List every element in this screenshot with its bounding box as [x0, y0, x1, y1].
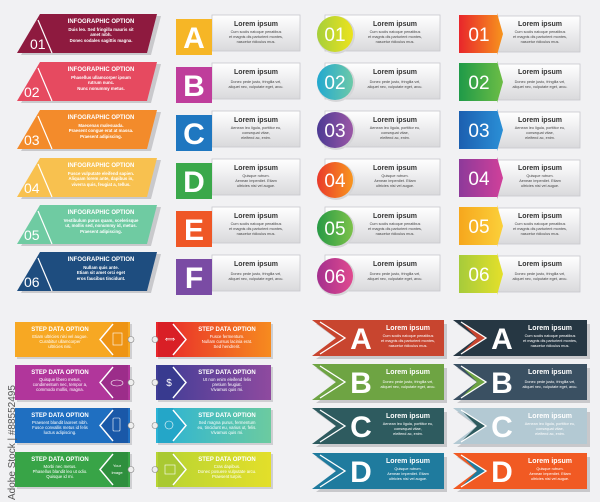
circle 04 — [317, 159, 440, 200]
circle 05: et magnis dis parturient montes, — [368, 227, 422, 231]
step data cards — [15, 322, 273, 489]
step card right 2: pretium feugiat. — [212, 382, 242, 387]
circle 06: 06 — [324, 267, 346, 288]
letter C: Lorem ipsum — [234, 117, 278, 124]
option 01: INFOGRAPHIC OPTION — [68, 19, 134, 25]
option 05: Praesent adipiscing. — [80, 229, 122, 234]
ribbon right D: Lorem ipsum — [528, 458, 572, 465]
ribbon right D — [453, 453, 590, 492]
arrow 01: nascetur ridiculus mus. — [521, 40, 559, 44]
ribbon left C: consequat vitae, — [394, 427, 422, 431]
ribbon right B: Lorem ipsum — [528, 369, 572, 376]
ribbon left A: Cum sociis natoque penatibus — [383, 334, 434, 338]
ribbon right D: ultricies nisi vel augue. — [531, 477, 569, 481]
arrow 05: Cum sociis natoque penatibus — [515, 222, 566, 226]
letter F: Donec pede justo, fringilla vel, — [231, 272, 281, 276]
letter A: Cum sociis natoque penatibus — [231, 30, 282, 34]
letter A: nascetur ridiculus mus. — [237, 40, 275, 44]
ribbon right D: D — [491, 456, 513, 489]
circle 05: 05 — [324, 219, 346, 240]
circle 03: Aenean leo ligula, porttitor eu, — [370, 126, 420, 130]
ribbon right B: aliquet nec, vulputate eget, arcu. — [523, 385, 577, 389]
arrow 04: ultricies nisi vel augue. — [521, 184, 559, 188]
step card left 2: Quisque libero metus, — [39, 377, 81, 382]
step card left 2: commodo mollis, magna. — [36, 387, 84, 392]
ribbon right B — [453, 364, 590, 403]
ribbon left C: Aenean leo ligula, porttitor eu, — [383, 422, 433, 426]
arrow 03: Aenean leo ligula, porttitor eu, — [515, 126, 565, 130]
letter D: ultricies nisi vel augue. — [237, 184, 275, 188]
letter B: Lorem ipsum — [234, 69, 278, 76]
option 05 — [17, 205, 161, 246]
circle 02: Donec pede justo, fringilla vel, — [370, 80, 420, 84]
letter A: et magnis dis parturient montes, — [229, 35, 283, 39]
circle 05: Lorem ipsum — [373, 213, 417, 220]
letter D: Aenean imperdiet. Etiam — [235, 179, 277, 183]
option 05: INFOGRAPHIC OPTION — [68, 210, 134, 216]
letter E: E — [184, 214, 204, 247]
option 01: Donec sodales sagittis magna. — [70, 38, 132, 43]
letter F: F — [185, 262, 203, 295]
step card right 3 — [152, 408, 273, 445]
ribbon banners A-D — [312, 320, 590, 492]
letter B — [176, 63, 300, 103]
circle 01: Cum sociis natoque penatibus — [370, 30, 421, 34]
option 04 — [17, 158, 161, 199]
arrow 05 — [459, 205, 580, 247]
letter E: et magnis dis parturient montes, — [229, 227, 283, 231]
step card left 3: STEP DATA OPTION — [31, 413, 89, 419]
option 03: Maecenas malesuada. — [78, 123, 124, 128]
step card right 2: Vivamus quis mi. — [211, 387, 243, 392]
arrow 06: 06 — [468, 265, 490, 286]
option 05: ut, mollis sed, nonummy id, metus. — [65, 223, 137, 228]
circle 04: Lorem ipsum — [373, 165, 417, 172]
ribbon right A: et magnis dis parturient montes, — [523, 339, 577, 343]
letter C: consequat vitae, — [242, 131, 270, 135]
arrow 06: Lorem ipsum — [518, 261, 562, 268]
ribbon left C: C — [350, 411, 372, 444]
circle 02 — [317, 63, 440, 102]
step card right 1: ⟺ — [165, 336, 175, 344]
ribbon left A: A — [350, 323, 372, 356]
arrow 01: Lorem ipsum — [518, 21, 562, 28]
letter E: Cum sociis natoque penatibus — [231, 222, 282, 226]
ribbon right A: Cum sociis natoque penatibus — [525, 334, 576, 338]
circle 03 — [317, 111, 440, 150]
ribbon right C: Lorem ipsum — [528, 413, 572, 420]
step card left 3: luctus adipiscing. — [44, 430, 76, 435]
option 06: Nullam quis ante. — [83, 265, 119, 270]
arrow 04: 04 — [468, 169, 490, 190]
arrow 01: et magnis dis parturient montes, — [513, 35, 567, 39]
option 03: INFOGRAPHIC OPTION — [68, 115, 134, 121]
letter C — [176, 111, 300, 151]
step card left 1: STEP DATA OPTION — [31, 327, 89, 333]
letter D: D — [183, 166, 205, 199]
step card left 4: Morbi nec metus. — [44, 464, 76, 469]
arrow 04 — [459, 157, 580, 199]
arrow 02: Donec pede justo, fringilla vel, — [515, 80, 565, 84]
ribbon right B: B — [491, 367, 513, 400]
option 01: 01 — [30, 36, 46, 52]
step card right 4: STEP DATA OPTION — [198, 457, 256, 463]
letter D: Quisque rutrum. — [242, 174, 270, 178]
option 04: Aliquam lorem ante, dapibus in, — [69, 176, 133, 181]
step card right 1: Fusce fermentum. — [210, 334, 244, 339]
ribbon left B: Lorem ipsum — [386, 369, 430, 376]
step card right 1: Sed hendrerit. — [214, 344, 240, 349]
option 05: 05 — [24, 227, 40, 243]
ribbon left D: D — [350, 456, 372, 489]
column: infographic options 01-06 — [17, 14, 161, 293]
circle 04: ultricies nisi vel augue. — [376, 184, 414, 188]
step card left 4: Your — [113, 463, 122, 468]
option 02: 02 — [24, 84, 40, 100]
arrow 01 — [459, 13, 580, 55]
ribbon left B: aliquet nec, vulputate eget, arcu. — [381, 385, 435, 389]
circle 05: Cum sociis natoque penatibus — [370, 222, 421, 226]
ribbon right C: Aenean leo ligula, porttitor eu, — [525, 422, 575, 426]
circle 06: Donec pede justo, fringilla vel, — [370, 272, 420, 276]
option 02: Phasellus ullamcorper ipsum — [71, 75, 131, 80]
option 04: 04 — [24, 180, 40, 196]
arrow 05: Lorem ipsum — [518, 213, 562, 220]
ribbon left B: Donec pede justo, fringilla vel, — [383, 380, 433, 384]
step card right 1: STEP DATA OPTION — [198, 327, 256, 333]
letter E — [176, 207, 300, 247]
option 03: Praesent congue erat at massa. — [69, 128, 133, 133]
circle 06: aliquet nec, vulputate eget, arcu. — [368, 277, 422, 281]
circle 02: Lorem ipsum — [373, 69, 417, 76]
ribbon left A: nascetur ridiculus mus. — [389, 344, 427, 348]
step card right 4 — [152, 452, 273, 489]
step card left 1: ultricies nisi. — [48, 344, 72, 349]
arrow 05: et magnis dis parturient montes, — [513, 227, 567, 231]
letter F: aliquet nec, vulputate eget, arcu. — [229, 277, 283, 281]
ribbon left D: Quisque rutrum. — [394, 467, 422, 471]
circle 01: Lorem ipsum — [373, 21, 417, 28]
step card right 3: Vivamus quis mi. — [211, 430, 243, 435]
arrow 02 — [459, 61, 580, 103]
circle 01: 01 — [324, 25, 346, 46]
ribbon left C: eleifend ac, enim. — [393, 432, 423, 436]
step card left 4: Phasellus blandit leo ut odio. — [33, 469, 87, 474]
step card left 4: Image — [111, 470, 123, 475]
step card right 2 — [152, 365, 273, 402]
letter C: C — [183, 118, 205, 151]
letter F — [176, 255, 300, 295]
option 06: INFOGRAPHIC OPTION — [68, 257, 134, 263]
step card left 4: STEP DATA OPTION — [31, 457, 89, 463]
circle 04: Aenean imperdiet. Etiam — [374, 179, 416, 183]
circle 01 — [317, 15, 440, 54]
ribbon left A: Lorem ipsum — [386, 325, 430, 332]
circle 05 — [317, 207, 440, 248]
step card right 4: Praesent turpis. — [212, 474, 242, 479]
circle 03: Lorem ipsum — [373, 117, 417, 124]
option 04: INFOGRAPHIC OPTION — [68, 163, 134, 169]
ribbon left D: ultricies nisi vel augue. — [389, 477, 427, 481]
ribbon right A: A — [491, 323, 513, 356]
step card left 1: Curabitur ullamcorper — [39, 339, 81, 344]
letter A: Lorem ipsum — [234, 21, 278, 28]
step card left 2: condimentum nec, tempor a, — [33, 382, 87, 387]
arrow 02: aliquet nec, vulputate eget, arcu. — [513, 85, 567, 89]
ribbon left B: B — [350, 367, 372, 400]
circle 06 — [317, 255, 440, 296]
option 06: eros faucibus tincidunt. — [77, 276, 125, 281]
step card right 4: Cras dapibus. — [214, 464, 240, 469]
step card right 2: STEP DATA OPTION — [198, 370, 256, 376]
arrow 02: Lorem ipsum — [518, 69, 562, 76]
ribbon left C: Lorem ipsum — [386, 413, 430, 420]
ribbon right B: Donec pede justo, fringilla vel, — [525, 380, 575, 384]
letter D: Lorem ipsum — [234, 165, 278, 172]
ribbon right A — [453, 320, 590, 359]
circle 03: 03 — [324, 121, 346, 142]
option 06: Etiam sit amet orci eget — [77, 270, 126, 275]
circle 02: 02 — [324, 73, 346, 94]
arrow 05: 05 — [468, 217, 490, 238]
letter C: Aenean leo ligula, porttitor eu, — [231, 126, 281, 130]
step card right 3: Sed magna purus, fermentum — [199, 420, 256, 425]
circle 04: 04 — [324, 171, 346, 192]
arrow 04: Lorem ipsum — [518, 165, 562, 172]
arrow 03: 03 — [468, 121, 490, 142]
option 04: viverra quis, feugiat a, tellus. — [72, 182, 130, 187]
arrow 01: Cum sociis natoque penatibus — [515, 30, 566, 34]
option 02: Nunc nonummy metus. — [77, 86, 125, 91]
step card left 3: Fusce convallis metus id felis — [32, 425, 88, 430]
step card right 3: eu, tincidunt eu, varius ut, felis. — [198, 425, 256, 430]
circle 02: aliquet nec, vulputate eget, arcu. — [368, 85, 422, 89]
ribbon left A: et magnis dis parturient montes, — [381, 339, 435, 343]
ribbon right C: consequat vitae, — [536, 427, 564, 431]
step card right 2: Ut non enim eleifend felis — [203, 377, 251, 382]
step card left 3 — [15, 408, 134, 445]
step card left 1: Etiam ultricies nisi vel augue. — [32, 334, 88, 339]
option 03 — [17, 110, 161, 151]
arrow 06: aliquet nec, vulputate eget, arcu. — [513, 277, 567, 281]
step card right 1: Nullam cursus lacinia erat. — [202, 339, 252, 344]
option 06: 06 — [24, 274, 40, 290]
option 06 — [17, 252, 161, 293]
option 03: 03 — [24, 132, 40, 148]
circle 03: eleifend ac, enim. — [380, 136, 410, 140]
ribbon left A — [312, 320, 447, 359]
arrow 04: Quisque rutrum. — [526, 174, 554, 178]
option 04: Fusce vulputate eleifend sapien. — [68, 171, 134, 176]
circle 05: nascetur ridiculus mus. — [376, 232, 414, 236]
arrow 05: nascetur ridiculus mus. — [521, 232, 559, 236]
ribbon left D — [312, 453, 447, 492]
step card left 4: Quisque id mi. — [46, 474, 74, 479]
option 02 — [17, 62, 161, 103]
arrow 06 — [459, 253, 580, 295]
step card right 3: STEP DATA OPTION — [198, 413, 256, 419]
option 02: INFOGRAPHIC OPTION — [68, 67, 134, 73]
ribbon right C: C — [491, 411, 513, 444]
ribbon left C — [312, 408, 447, 447]
arrow 01: 01 — [468, 25, 490, 46]
arrow 03: Lorem ipsum — [518, 117, 562, 124]
letter A — [176, 15, 300, 55]
option 01: Duis leo. Sed fringilla mauris sit — [68, 27, 134, 32]
letter C: eleifend ac, enim. — [241, 136, 271, 140]
step card left 1 — [15, 322, 134, 359]
arrow 03 — [459, 109, 580, 151]
arrow 04: Aenean imperdiet. Etiam — [519, 179, 561, 183]
ribbon left B — [312, 364, 447, 403]
step card left 2: STEP DATA OPTION — [31, 370, 89, 376]
step card right 2: $ — [166, 378, 172, 389]
letter B: aliquet nec, vulputate eget, arcu. — [229, 85, 283, 89]
arrow 03: eleifend ac, enim. — [525, 136, 555, 140]
letter D — [176, 159, 300, 199]
letter F: Lorem ipsum — [234, 261, 278, 268]
watermark: stock id: Adobe Stock | #88552495 — [7, 385, 18, 500]
step card right 1 — [152, 322, 273, 359]
circle 03: consequat vitae, — [381, 131, 409, 135]
ribbon left D: Lorem ipsum — [386, 458, 430, 465]
letter E: nascetur ridiculus mus. — [237, 232, 275, 236]
ribbon right D: Aenean imperdiet. Etiam — [529, 472, 571, 476]
column: arrow tabs 01-06 — [459, 13, 580, 295]
option 02: rutrum nunc. — [88, 80, 114, 85]
step card left 4 — [15, 452, 134, 489]
ribbon right C — [453, 408, 590, 447]
option 03: Praesent adipiscing. — [80, 134, 122, 139]
arrow 06: Donec pede justo, fringilla vel, — [515, 272, 565, 276]
ribbon right D: Quisque rutrum. — [536, 467, 564, 471]
arrow 02: 02 — [468, 73, 490, 94]
circle 01: nascetur ridiculus mus. — [376, 40, 414, 44]
column: letter boxes A-F — [176, 15, 300, 295]
ribbon right C: eleifend ac, enim. — [535, 432, 565, 436]
step card left 3: Praesent blandit laoreet nibh. — [32, 420, 88, 425]
step card left 2 — [15, 365, 134, 402]
circle 04: Quisque rutrum. — [381, 174, 409, 178]
letter B: B — [183, 70, 205, 103]
letter B: Donec pede justo, fringilla vel, — [231, 80, 281, 84]
option 01: amet nibh. — [90, 32, 112, 37]
column: circle numbers 01-06 — [317, 15, 440, 296]
circle 01: et magnis dis parturient montes, — [368, 35, 422, 39]
letter E: Lorem ipsum — [234, 213, 278, 220]
ribbon right A: nascetur ridiculus mus. — [531, 344, 569, 348]
circle 06: Lorem ipsum — [373, 261, 417, 268]
arrow 03: consequat vitae, — [526, 131, 554, 135]
letter A: A — [183, 22, 205, 55]
option 05: Vestibulum purus quam, scelerisque — [64, 218, 139, 223]
ribbon left D: Aenean imperdiet. Etiam — [387, 472, 429, 476]
ribbon right A: Lorem ipsum — [528, 325, 572, 332]
option 01 — [17, 14, 161, 55]
step card right 4: Donec posuere vulputate arcu. — [198, 469, 256, 474]
